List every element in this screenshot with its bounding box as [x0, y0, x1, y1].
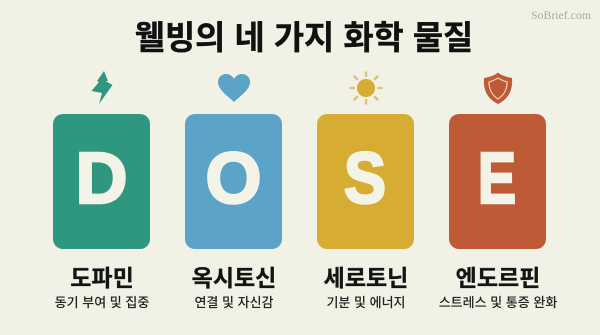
icon: heart: [218, 74, 250, 102]
panel: O card: O: [205, 139, 262, 219]
panel: S card: [317, 114, 414, 249]
watermark: SoBrief.com: [531, 8, 591, 22]
text: endorphin description: 스트레스 및 통증 완화: [439, 292, 557, 311]
icon: lightning bolt: [92, 71, 112, 104]
text: dopamine description: 동기 부여 및 집중: [55, 292, 149, 311]
panel: E card: E: [478, 139, 517, 219]
heading: oxytocin: 옥시토신: [192, 259, 276, 293]
panel: D card: D: [76, 139, 128, 219]
panel: O card: [185, 114, 282, 249]
panel: S card: S: [344, 139, 387, 219]
panel: D card: [53, 114, 150, 249]
title: 웰빙의 네 가지 화학 물질: [135, 12, 473, 59]
heading: endorphin: 엔도르핀: [456, 259, 540, 293]
heading: serotonin: 세로토닌: [324, 259, 408, 293]
panel: E card: [449, 114, 546, 249]
text: serotonin description: 기분 및 에너지: [326, 292, 406, 311]
text: oxytocin description: 연결 및 자신감: [194, 292, 274, 311]
heading: dopamine: 도파민: [70, 259, 134, 293]
icon: shield: [484, 72, 512, 104]
icon: sun: [349, 71, 383, 105]
